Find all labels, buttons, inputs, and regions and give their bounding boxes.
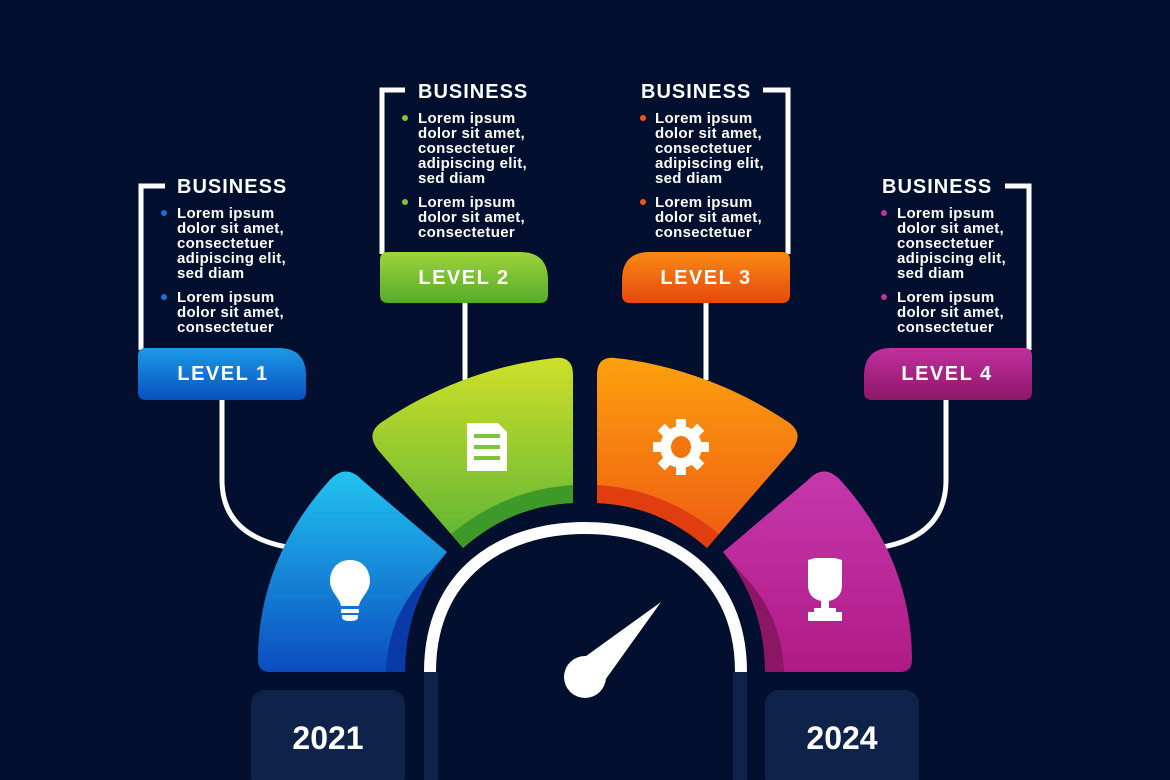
text block: level 1: consectetuer	[177, 235, 274, 252]
tab: level 2	[380, 252, 548, 303]
text block: level 2: Lorem ipsum	[418, 110, 515, 127]
text block: level 3: adipiscing elit,	[655, 155, 764, 172]
text block: level 1: Lorem ipsum	[177, 289, 274, 306]
year box: 2021: 2021	[292, 720, 364, 756]
text block: level 1: dolor sit amet,	[177, 304, 284, 321]
text block: level 4: BUSINESS	[882, 176, 992, 198]
text block: level 3: dolor sit amet,	[655, 125, 762, 142]
text block: level 2: adipiscing elit,	[418, 155, 527, 172]
segment: blue level 1	[258, 471, 447, 672]
text block: level 3	[640, 81, 764, 241]
text block: level 2: dolor sit amet,	[418, 125, 525, 142]
text block: level 4: Lorem ipsum	[897, 205, 994, 222]
text block: level 2	[402, 81, 528, 241]
text block: level 3: consectetuer	[655, 140, 752, 157]
year box: 2024: 2024	[806, 720, 878, 756]
text block: level 3: sed diam	[655, 170, 722, 187]
tab: level 2: LEVEL 2	[418, 267, 510, 289]
needle	[564, 602, 661, 698]
text block: level 3: BUSINESS	[641, 81, 751, 103]
year box: 2024	[765, 690, 919, 780]
text block: level 4: adipiscing elit,	[897, 250, 1006, 267]
text block: level 3: Lorem ipsum	[655, 194, 752, 211]
text block: level 3: Lorem ipsum	[655, 110, 752, 127]
text block: level 2: Lorem ipsum	[418, 194, 515, 211]
tab: level 3	[622, 252, 790, 303]
icon: trophy	[808, 558, 842, 621]
icon: gear	[653, 419, 709, 475]
icon: light bulb	[330, 560, 370, 621]
text block: level 1: adipiscing elit,	[177, 250, 286, 267]
segment: orange level 3	[597, 358, 798, 548]
text block: level 1: Lorem ipsum	[177, 205, 274, 222]
tab: level 4	[864, 348, 1032, 400]
text block: level 1	[161, 176, 287, 336]
text block: level 2: BUSINESS	[418, 81, 528, 103]
text block: level 2: consectetuer	[418, 140, 515, 157]
connector lines	[141, 90, 1029, 547]
text block: level 4	[881, 176, 1006, 336]
text block: level 1: sed diam	[177, 265, 244, 282]
icon: document	[467, 423, 507, 471]
text block: level 3: consectetuer	[655, 224, 752, 241]
year box: 2021	[251, 690, 405, 780]
text block: level 4: consectetuer	[897, 235, 994, 252]
text block: level 4: dolor sit amet,	[897, 220, 1004, 237]
tab: level 3: LEVEL 3	[660, 267, 752, 289]
tab: level 1	[138, 348, 306, 400]
text block: level 1: BUSINESS	[177, 176, 287, 198]
text block: level 3: dolor sit amet,	[655, 209, 762, 226]
segment: magenta level 4	[723, 471, 912, 672]
text block: level 1: dolor sit amet,	[177, 220, 284, 237]
tab: level 1: LEVEL 1	[177, 363, 269, 385]
text block: level 1: consectetuer	[177, 319, 274, 336]
text block: level 4: sed diam	[897, 265, 964, 282]
tab: level 4: LEVEL 4	[901, 363, 993, 385]
text block: level 4: dolor sit amet,	[897, 304, 1004, 321]
text block: level 4: consectetuer	[897, 319, 994, 336]
text block: level 2: consectetuer	[418, 224, 515, 241]
text block: level 2: dolor sit amet,	[418, 209, 525, 226]
gauge	[424, 528, 747, 780]
segment: green level 2	[372, 358, 573, 548]
text block: level 2: sed diam	[418, 170, 485, 187]
text block: level 4: Lorem ipsum	[897, 289, 994, 306]
